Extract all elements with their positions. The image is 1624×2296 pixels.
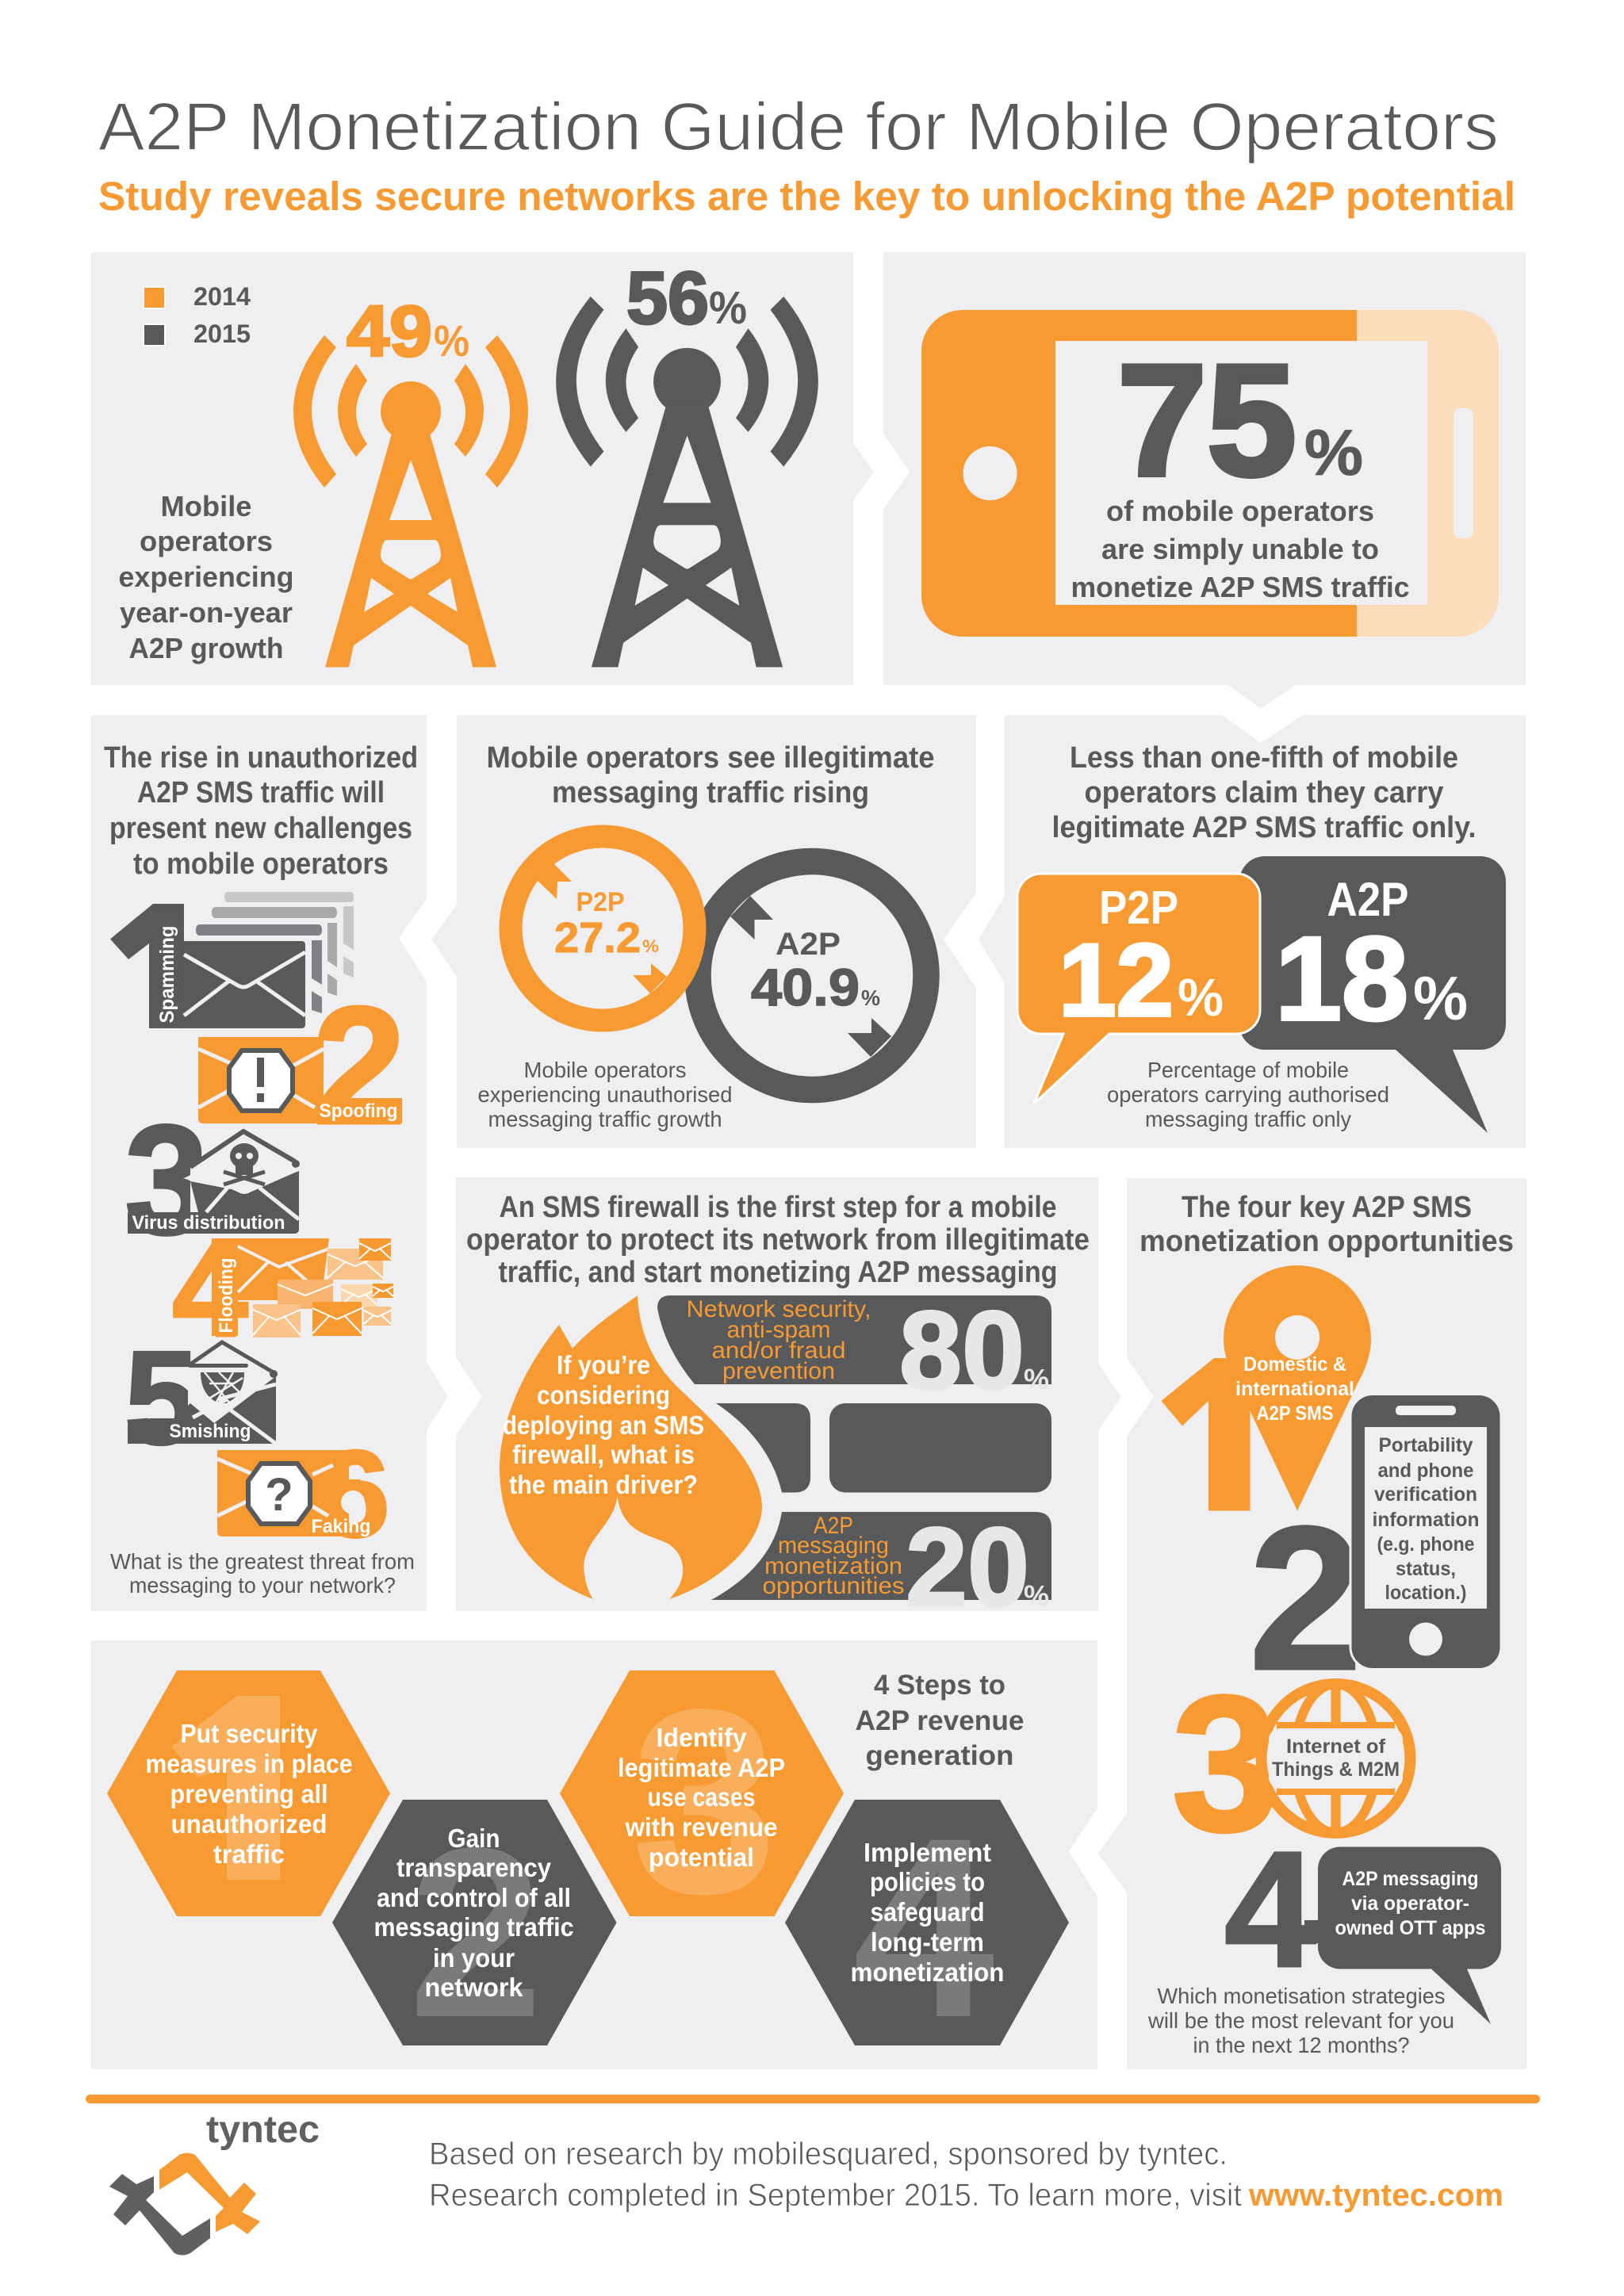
heading: legitimate traffic: operators claim they carry bbox=[1085, 776, 1443, 809]
opportunity 4: speech bubble bbox=[1224, 1818, 1501, 2024]
step 2 hexagon: network bbox=[425, 1973, 523, 2002]
panel: legitimate traffic bbox=[979, 715, 1526, 1148]
stat: 49%: % bbox=[434, 316, 469, 365]
text: opportunities question: Which monetisation strategies bbox=[1158, 1984, 1445, 2008]
threat 4: flooding: 4 bbox=[172, 1213, 248, 1365]
opportunity 2: smartphone: and phone bbox=[1378, 1460, 1474, 1482]
icon: fishing net bbox=[201, 1372, 244, 1403]
threat 6: faking bbox=[217, 1425, 390, 1563]
threat 3: virus distribution bbox=[124, 1093, 300, 1267]
step 2 hexagon: transparency bbox=[396, 1853, 552, 1882]
threat 6: faking: ? bbox=[265, 1469, 293, 1521]
heading: four steps: 4 Steps to bbox=[874, 1670, 1005, 1701]
bar: 20 percent bbox=[711, 1504, 1051, 1629]
text: flame question: considering bbox=[537, 1380, 670, 1410]
icon: orange tower 2014 bbox=[293, 335, 528, 668]
heading: traffic rising bbox=[487, 741, 934, 809]
speech bubble: A2P 18%: % bbox=[1413, 963, 1468, 1033]
step 4 hexagon: safeguard bbox=[871, 1897, 985, 1927]
heading: four steps: A2P revenue bbox=[855, 1705, 1025, 1736]
text: flame question bbox=[503, 1350, 704, 1499]
stat: P2P 27.2%: 27.2 bbox=[554, 914, 641, 962]
bar: 20 percent: A2P bbox=[814, 1513, 853, 1539]
step 1 hexagon: 1 bbox=[149, 1647, 347, 1934]
title: A2P Monetization Guide for Mobile Operators bbox=[98, 90, 1499, 165]
text: 75 percent caption: monetize A2P SMS traffic bbox=[1071, 571, 1410, 603]
step 2 hexagon bbox=[332, 1797, 617, 2068]
heading: four steps bbox=[855, 1670, 1025, 1771]
stat: 75%: % bbox=[1304, 417, 1363, 489]
threat 2: spoofing bbox=[198, 971, 406, 1159]
step 2 hexagon: in your bbox=[433, 1943, 515, 1973]
opportunity 2: smartphone: (e.g. phone bbox=[1377, 1533, 1475, 1556]
heading: threats: present new challenges bbox=[109, 812, 412, 845]
footer text: www.tyntec.com bbox=[1248, 2178, 1503, 2213]
text: flame question: deploying an SMS bbox=[503, 1410, 704, 1440]
text: opportunities question: will be the most relevant for you bbox=[1147, 2008, 1454, 2033]
opportunity 3: globe: Things & M2M bbox=[1272, 1758, 1400, 1781]
text: opportunities question: in the next 12 months? bbox=[1193, 2033, 1410, 2057]
opportunity 4: speech bubble: owned OTT apps bbox=[1335, 1917, 1486, 1939]
heading: four steps: generation bbox=[866, 1740, 1013, 1771]
text: bubbles caption bbox=[1107, 1058, 1389, 1131]
logo: tyntec: tyntec bbox=[206, 2109, 320, 2151]
speech bubble: P2P 12%: P2P bbox=[1099, 882, 1178, 934]
step 1 hexagon: Put security bbox=[181, 1719, 318, 1748]
subtitle: Study reveals secure networks are the key to unlocking the A2P potential bbox=[98, 174, 1515, 219]
opportunity 2: smartphone: 2 bbox=[1249, 1483, 1362, 1712]
threat 2: spoofing: 2 bbox=[312, 971, 406, 1159]
heading: legitimate traffic: legitimate A2P SMS traffic only. bbox=[1051, 811, 1477, 844]
heading: traffic rising: Mobile operators see illegitimate bbox=[487, 741, 934, 775]
bar: 20 percent: monetization bbox=[764, 1553, 902, 1579]
step 2 hexagon: Gain bbox=[447, 1823, 500, 1853]
step 1 hexagon: unauthorized bbox=[171, 1809, 327, 1839]
chart: A2P ring bbox=[698, 861, 926, 1089]
step 3 hexagon bbox=[560, 1655, 844, 1949]
speech bubble: P2P 12%: % bbox=[1178, 968, 1224, 1027]
threat 5: smishing: 5 bbox=[124, 1323, 198, 1472]
opportunity 2: smartphone: location.) bbox=[1385, 1582, 1467, 1604]
opportunity 1: location pin: international bbox=[1235, 1378, 1354, 1400]
text: towers caption: A2P growth bbox=[128, 632, 284, 664]
opportunity 1: location pin bbox=[1161, 1265, 1371, 1511]
icon: dark tower 2015 bbox=[556, 297, 818, 668]
heading: firewall: An SMS firewall is the first step for a mobile bbox=[500, 1191, 1056, 1224]
text: threats question bbox=[110, 1549, 415, 1598]
stat: A2P 40.9%: % bbox=[861, 985, 880, 1010]
speech bubble: P2P 12%: 12 bbox=[1059, 922, 1174, 1038]
stat: 75%: 75 bbox=[1117, 332, 1297, 509]
text: rings caption bbox=[477, 1058, 733, 1131]
text: bubbles caption: operators carrying authorised bbox=[1107, 1082, 1389, 1107]
text: flame question: the main driver? bbox=[509, 1470, 698, 1499]
step 2 hexagon: and control of all bbox=[377, 1883, 571, 1912]
speech bubble: A2P 18%: A2P bbox=[1327, 873, 1408, 926]
logo: tyntec bbox=[109, 2109, 320, 2255]
step 4 hexagon: long-term bbox=[871, 1927, 984, 1957]
legend: 2015 bbox=[193, 320, 251, 348]
step 4 hexagon bbox=[785, 1785, 1069, 2071]
panel: 75 percent phone bbox=[883, 252, 1526, 709]
icon: phone bbox=[921, 310, 1499, 637]
text: bubbles caption: Percentage of mobile bbox=[1147, 1058, 1349, 1082]
bar: 80 percent: prevention bbox=[722, 1358, 835, 1384]
panel: threats bbox=[91, 715, 448, 1611]
text: flame question: If you’re bbox=[557, 1350, 650, 1380]
step 4 hexagon: Implement bbox=[864, 1838, 991, 1867]
text: towers caption: year-on-year bbox=[120, 596, 293, 629]
opportunity 2: smartphone: verification bbox=[1374, 1483, 1477, 1506]
text: towers caption bbox=[119, 490, 293, 664]
footer text: Research completed in September 2015. To learn more, visit bbox=[429, 2178, 1242, 2213]
step 3 hexagon: legitimate A2P bbox=[618, 1753, 785, 1782]
bar: 80 percent: anti-spam bbox=[726, 1317, 831, 1343]
bar: 80 percent bbox=[657, 1288, 1051, 1413]
bar: 80 percent: 80 bbox=[899, 1288, 1025, 1413]
opportunity 3: globe bbox=[1171, 1655, 1410, 1872]
heading: firewall: traffic, and start monetizing A2P messaging bbox=[498, 1256, 1058, 1289]
stat: 56% bbox=[626, 256, 747, 339]
speech bubble: P2P 12% bbox=[1017, 874, 1260, 1104]
step 4 hexagon: policies to bbox=[870, 1867, 985, 1896]
text: towers caption: Mobile bbox=[160, 490, 252, 522]
icon: skull bbox=[224, 1143, 265, 1184]
heading: traffic rising: messaging traffic rising bbox=[552, 776, 869, 809]
footer text bbox=[429, 2137, 1503, 2213]
text: towers caption: operators bbox=[140, 525, 273, 557]
bar: 80 percent: % bbox=[1024, 1363, 1049, 1395]
step 2 hexagon: messaging traffic bbox=[374, 1912, 574, 1942]
threat 1: spamming: 1 bbox=[98, 872, 227, 1066]
stat: 56%: % bbox=[709, 282, 747, 334]
threat 6: faking: 6 bbox=[317, 1425, 390, 1563]
text: rings caption: Mobile operators bbox=[523, 1058, 687, 1082]
threat 3: virus distribution: 3 bbox=[124, 1093, 209, 1267]
legend bbox=[144, 282, 251, 348]
panel: A2P growth towers bbox=[91, 252, 874, 685]
text: rings caption: experiencing unauthorised bbox=[477, 1082, 733, 1107]
opportunity 3: globe: Internet of bbox=[1286, 1735, 1386, 1758]
text: bubbles caption: messaging traffic only bbox=[1145, 1107, 1351, 1131]
heading: opportunities: The four key A2P SMS bbox=[1182, 1191, 1472, 1224]
threat 3: virus distribution: Virus distribution bbox=[132, 1212, 285, 1234]
threat 2: spoofing: Spoofing bbox=[319, 1100, 398, 1122]
threat 6: faking: Faking bbox=[311, 1516, 371, 1537]
threat 4: flooding bbox=[172, 1213, 393, 1365]
panel: illegitimate traffic rising bbox=[431, 715, 976, 1148]
heading: threats: to mobile operators bbox=[133, 848, 389, 881]
stat: A2P 40.9% bbox=[751, 927, 880, 1016]
opportunity 2: smartphone: Portability bbox=[1378, 1434, 1473, 1456]
step 4 hexagon: 4 bbox=[852, 1785, 997, 2071]
text: flame question: firewall, what is bbox=[512, 1440, 695, 1469]
step 3 hexagon: Identify bbox=[657, 1723, 747, 1752]
text: opportunities question bbox=[1147, 1984, 1454, 2057]
step 3 hexagon: with revenue bbox=[625, 1812, 777, 1842]
step 1 hexagon bbox=[107, 1670, 390, 1916]
step 3 hexagon: potential bbox=[649, 1843, 754, 1872]
text: 75 percent caption: of mobile operators bbox=[1106, 495, 1374, 527]
opportunity 2: smartphone: information bbox=[1372, 1509, 1480, 1531]
stat: P2P 27.2%: % bbox=[642, 936, 659, 956]
opportunity 1: location pin: A2P SMS bbox=[1256, 1402, 1334, 1425]
legend: 2014 bbox=[193, 282, 251, 311]
stat: 49%: 49 bbox=[347, 292, 432, 372]
step 2 hexagon: 2 bbox=[408, 1797, 543, 2068]
step 4 hexagon: monetization bbox=[850, 1957, 1004, 1987]
heading: opportunities: monetization opportunities bbox=[1139, 1225, 1514, 1258]
chart: P2P ring bbox=[511, 836, 695, 1020]
threat 1: spamming bbox=[110, 892, 354, 1028]
opportunity 2: smartphone: status, bbox=[1396, 1558, 1456, 1580]
heading: legitimate traffic: Less than one-fifth of mobile bbox=[1070, 741, 1458, 775]
panel: four steps bbox=[91, 1640, 1097, 2071]
heading: opportunities bbox=[1139, 1191, 1514, 1258]
stat: 49% bbox=[347, 292, 469, 372]
bar: 80 percent: Network security, bbox=[687, 1296, 871, 1322]
heading: threats: A2P SMS traffic will bbox=[137, 776, 385, 809]
heading: firewall: operator to protect its network from illegitimate bbox=[466, 1223, 1090, 1257]
bar: 20 percent: opportunities bbox=[763, 1573, 904, 1599]
stat: P2P 27.2%: P2P bbox=[576, 887, 625, 917]
heading: firewall bbox=[466, 1191, 1090, 1289]
icon: flame bbox=[500, 1295, 762, 1599]
opportunity 1: location pin: Domestic & bbox=[1243, 1353, 1346, 1376]
opportunity 4: speech bubble: via operator- bbox=[1351, 1892, 1469, 1915]
opportunity 4: speech bubble: 4 bbox=[1224, 1818, 1316, 2002]
stat: 56%: 56 bbox=[626, 256, 709, 339]
text: 75 percent caption: are simply unable to bbox=[1101, 533, 1379, 565]
stat: A2P 40.9%: A2P bbox=[776, 927, 841, 962]
bar: 20 percent: messaging bbox=[778, 1533, 889, 1559]
step 3 hexagon: 3 bbox=[631, 1655, 777, 1949]
heading: legitimate traffic bbox=[1051, 741, 1477, 844]
step 3 hexagon: use cases bbox=[647, 1782, 755, 1812]
threat 5: smishing bbox=[124, 1323, 278, 1472]
opportunity 1: location pin: 1 bbox=[1148, 1318, 1301, 1556]
step 1 hexagon: measures in place bbox=[146, 1749, 352, 1778]
step 1 hexagon: preventing all bbox=[170, 1779, 328, 1808]
threat 4: flooding: Flooding bbox=[216, 1257, 237, 1334]
opportunity 4: speech bubble: A2P messaging bbox=[1342, 1868, 1478, 1890]
speech bubble: A2P 18%: 18 bbox=[1275, 912, 1408, 1045]
step 1 hexagon: traffic bbox=[213, 1839, 285, 1869]
stat: P2P 27.2% bbox=[554, 887, 659, 962]
text: rings caption: messaging traffic growth bbox=[488, 1107, 722, 1131]
panel: four opportunities bbox=[1098, 1178, 1526, 2069]
text: threats question: messaging to your network? bbox=[129, 1573, 396, 1598]
bar: 20 percent: % bbox=[1024, 1579, 1049, 1612]
footer text: Based on research by mobilesquared, sponsored by tyntec. bbox=[429, 2137, 1228, 2172]
opportunity 2: smartphone bbox=[1249, 1394, 1501, 1712]
panel: SMS firewall bbox=[456, 1177, 1121, 1629]
bar: middle empty bbox=[716, 1403, 1051, 1492]
bar: 80 percent: and/or fraud bbox=[712, 1337, 845, 1364]
speech bubble: A2P 18% bbox=[1239, 856, 1506, 1133]
threat 1: spamming: Spamming bbox=[156, 926, 178, 1023]
opportunity 3: globe: 3 bbox=[1171, 1655, 1279, 1872]
heading: threats: The rise in unauthorized bbox=[104, 741, 418, 775]
text: towers caption: experiencing bbox=[119, 561, 293, 593]
text: threats question: What is the greatest threat from bbox=[110, 1549, 415, 1574]
text: 75 percent caption bbox=[1071, 495, 1410, 603]
heading: threats bbox=[104, 741, 418, 881]
bar: 20 percent: 20 bbox=[906, 1504, 1029, 1629]
stat: A2P 40.9%: 40.9 bbox=[751, 958, 860, 1016]
threat 5: smishing: Smishing bbox=[170, 1421, 251, 1442]
